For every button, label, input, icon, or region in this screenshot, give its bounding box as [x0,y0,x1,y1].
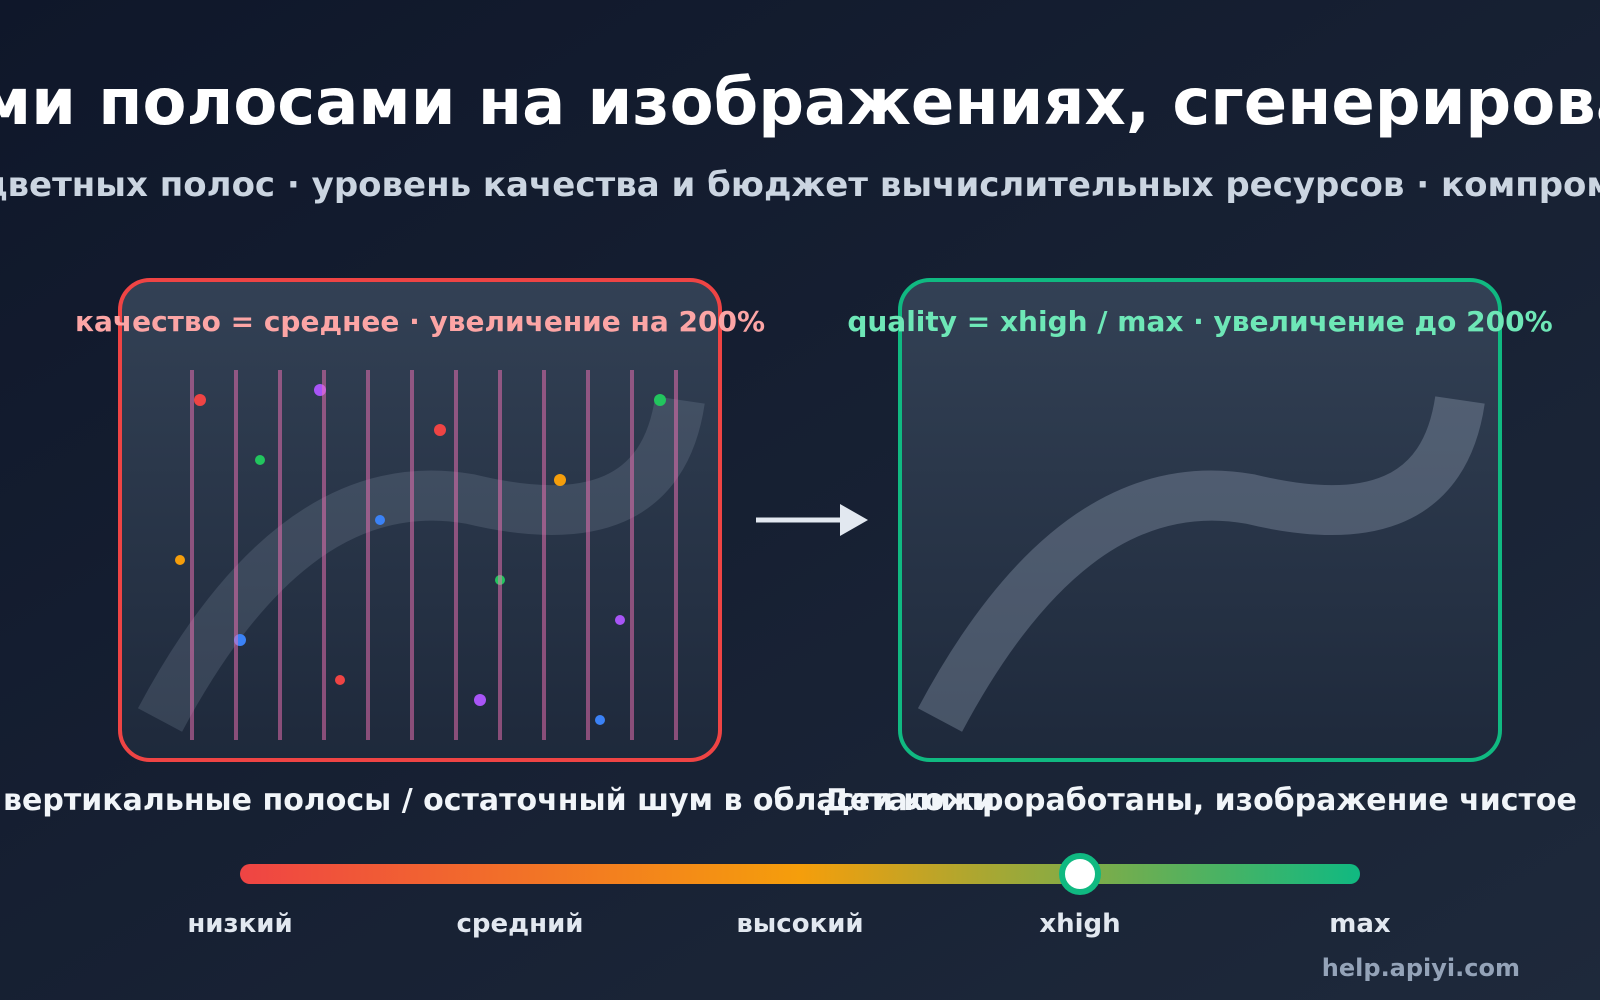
panel: before [75,280,765,760]
caption: after: Детали проработаны, изображение чистое [823,783,1577,818]
panel label: before: качество = среднее · увеличение на 200% [75,305,765,338]
slider labels [187,909,1391,939]
vertical banding lines [192,370,676,740]
panel: after [847,280,1553,760]
watermark: help.apiyi.com [1322,954,1520,982]
slider labels: средний [456,909,584,939]
slider labels: высокий [736,909,864,939]
slider track [240,864,1360,884]
arrow [756,504,868,536]
slider knob [1062,856,1098,892]
slider labels: xhigh [1039,909,1121,939]
illustration curve: before [160,400,680,720]
quality slider [187,856,1391,939]
illustration curve: after [940,400,1460,720]
slider labels: низкий [187,909,293,939]
noise dots [175,384,666,725]
slider labels: max [1329,909,1391,939]
panel label: after: quality = xhigh / max · увеличение до 200% [847,305,1553,338]
